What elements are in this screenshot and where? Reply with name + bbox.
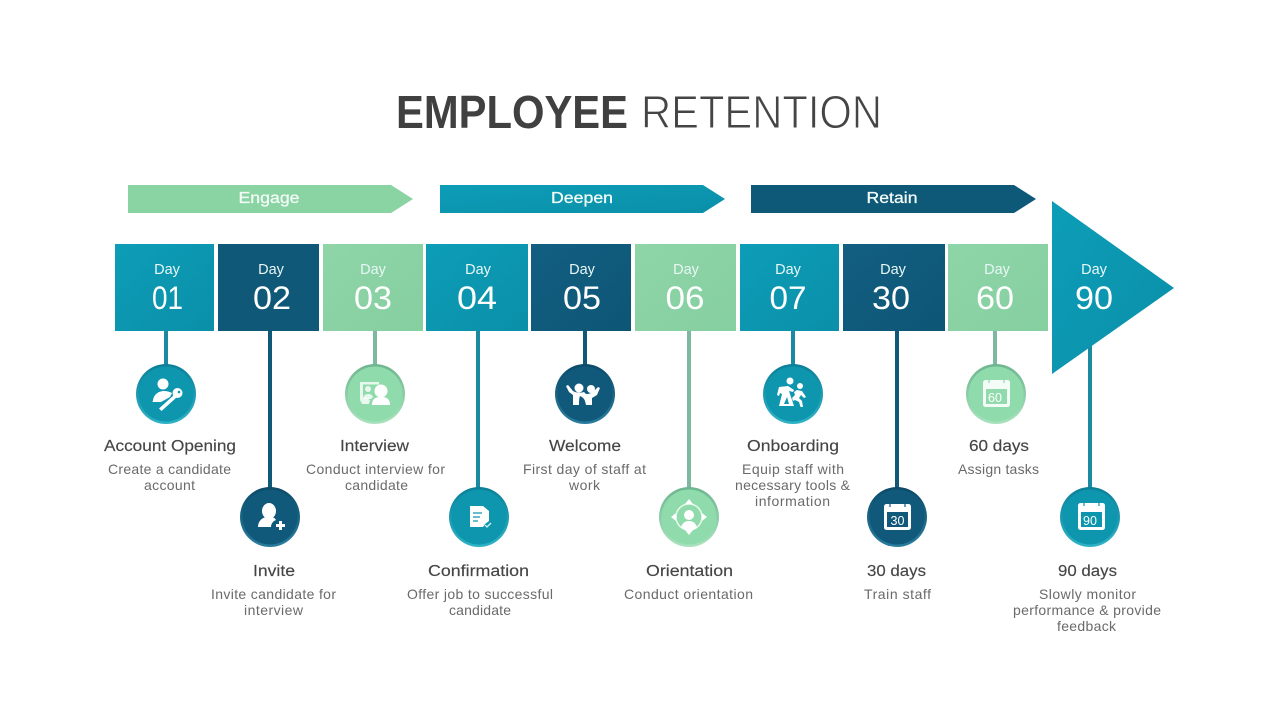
description: Slowly monitor xyxy=(1039,586,1136,602)
day box 06 xyxy=(635,244,736,331)
phase arrow: Engage: Engage xyxy=(238,190,300,207)
day box 07: 07 xyxy=(770,280,806,316)
day box 03 xyxy=(323,244,423,331)
description: work xyxy=(568,477,601,493)
day box 05: 05 xyxy=(563,280,601,316)
day box 06: 06 xyxy=(666,280,704,316)
description: interview xyxy=(244,602,304,618)
description xyxy=(1013,586,1161,634)
day box 01 xyxy=(115,244,214,331)
day box 02 xyxy=(218,244,319,331)
day box 30: 30 xyxy=(872,280,910,316)
description: Train staff xyxy=(864,586,931,602)
day arrow 90: Day xyxy=(1081,262,1108,278)
phase arrow: Retain xyxy=(751,185,1036,213)
day box 60 xyxy=(948,244,1048,331)
description: performance & provide xyxy=(1013,602,1161,618)
heading: 60 days xyxy=(969,438,1029,455)
description: candidate xyxy=(345,477,408,493)
icon: two people waving xyxy=(555,364,615,424)
description xyxy=(735,461,851,509)
description: Conduct orientation xyxy=(624,586,753,602)
description: Invite candidate for xyxy=(211,586,336,602)
heading: Welcome xyxy=(549,438,621,455)
phase arrow: Deepen: Deepen xyxy=(551,190,613,207)
phase arrow: Deepen xyxy=(440,185,725,213)
description: First day of staff at xyxy=(523,461,646,477)
description xyxy=(407,586,553,618)
day box 04 xyxy=(426,244,528,331)
node: 60 days xyxy=(958,364,1039,477)
description xyxy=(306,461,445,493)
day box 01: 01 xyxy=(152,280,183,316)
icon: add user xyxy=(240,487,300,547)
description xyxy=(211,586,336,618)
day box 06: Day xyxy=(673,262,700,278)
description: Assign tasks xyxy=(958,461,1039,477)
node: 90 days xyxy=(1013,487,1161,634)
day arrow 90 xyxy=(1052,201,1174,374)
day box 03: 03 xyxy=(354,280,392,316)
icon: helping hand figures xyxy=(763,364,823,424)
icon: calendar 60: 60 xyxy=(988,391,1002,405)
icon: video interview xyxy=(345,364,405,424)
day box 30: Day xyxy=(880,262,907,278)
phase arrow: Retain: Retain xyxy=(866,190,918,207)
day box 03: Day xyxy=(360,262,387,278)
day box 07: Day xyxy=(775,262,802,278)
day box 60: 60 xyxy=(976,280,1014,316)
node: Invite xyxy=(211,487,336,618)
day box 05: Day xyxy=(569,262,596,278)
description: Offer job to successful xyxy=(407,586,553,602)
day box 04: 04 xyxy=(457,280,497,316)
description: Create a candidate xyxy=(108,461,231,477)
icon: person with key xyxy=(136,364,196,424)
day box 02: Day xyxy=(258,262,285,278)
icon: document with check xyxy=(449,487,509,547)
icon: calendar 90 xyxy=(1060,487,1120,547)
day box 02: 02 xyxy=(253,280,291,316)
heading: Confirmation xyxy=(428,563,529,580)
icon: calendar 90: 90 xyxy=(1083,514,1097,528)
node: Account Opening xyxy=(104,364,236,493)
description: candidate xyxy=(449,602,511,618)
description xyxy=(523,461,646,493)
day box 05 xyxy=(531,244,631,331)
heading: Orientation xyxy=(646,563,733,580)
heading: Invite xyxy=(253,563,295,580)
icon: calendar 30: 30 xyxy=(891,514,904,528)
node: Welcome xyxy=(523,364,646,493)
title: EMPLOYEE xyxy=(396,86,628,138)
day box 04: Day xyxy=(465,262,492,278)
node: Orientation xyxy=(624,487,753,602)
heading: 30 days xyxy=(867,563,926,580)
description xyxy=(108,461,231,493)
heading: 90 days xyxy=(1058,563,1117,580)
description: Equip staff with xyxy=(742,461,844,477)
icon: person with four directions xyxy=(659,487,719,547)
phase arrow: Engage xyxy=(128,185,413,213)
heading: Onboarding xyxy=(747,438,839,455)
day box 60: Day xyxy=(984,262,1011,278)
description: account xyxy=(144,477,195,493)
connector lines xyxy=(166,331,1090,490)
node: Confirmation xyxy=(407,487,553,618)
description: necessary tools & xyxy=(735,477,851,493)
description: Conduct interview for xyxy=(306,461,445,477)
node: Interview xyxy=(306,364,445,493)
description: information xyxy=(755,493,830,509)
title: RETENTION xyxy=(641,86,882,138)
day arrow 90: 90 xyxy=(1075,280,1113,316)
day box 07 xyxy=(740,244,839,331)
node: 30 days xyxy=(864,487,931,602)
description: feedback xyxy=(1057,618,1117,634)
heading: Interview xyxy=(340,438,410,455)
day box 01: Day xyxy=(154,262,181,278)
day box 30 xyxy=(843,244,945,331)
node: Onboarding xyxy=(735,364,851,509)
heading: Account Opening xyxy=(104,438,236,455)
